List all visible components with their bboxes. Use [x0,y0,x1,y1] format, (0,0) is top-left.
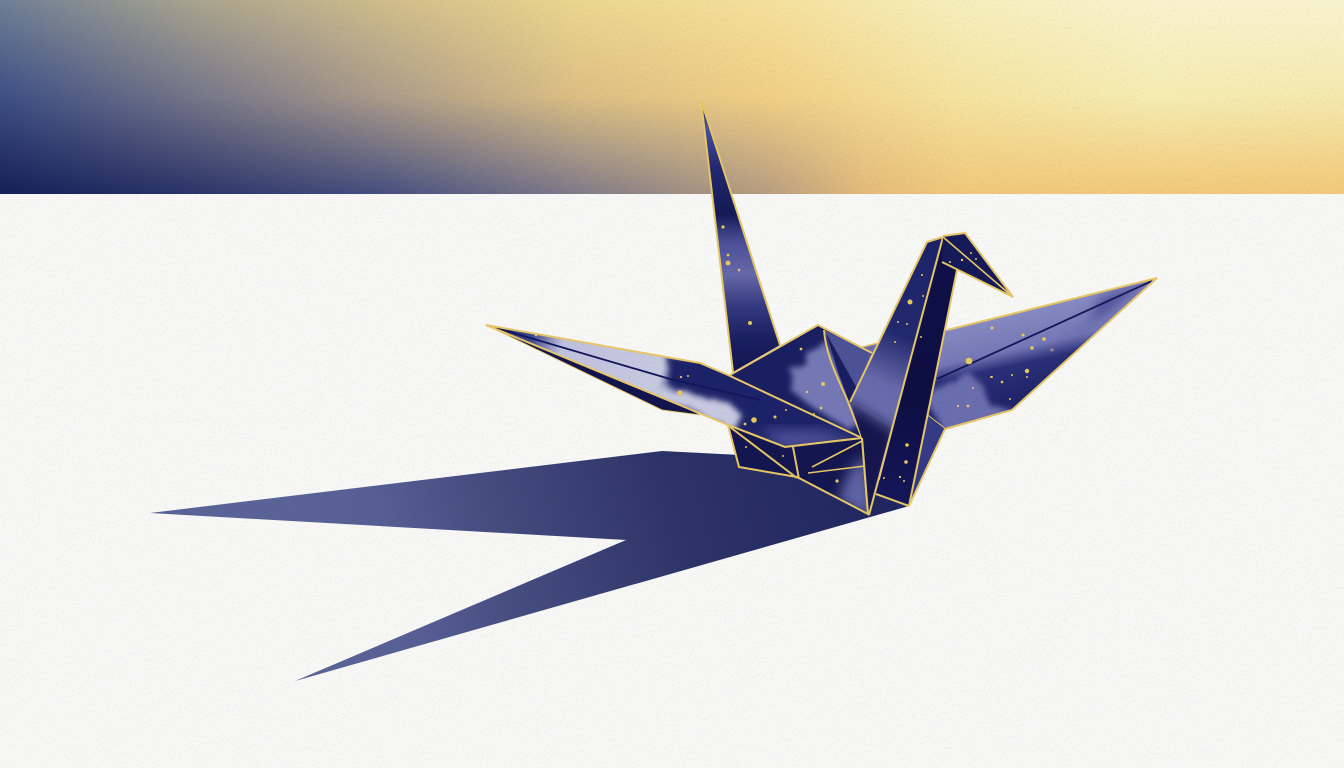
body flap fold [824,330,862,438]
crane right wing [862,275,1157,435]
crane body [730,325,872,438]
left wing fold [486,325,760,400]
crane head and beak [942,233,1013,297]
crane neck [845,237,957,530]
right wing fold [937,281,1152,379]
origami crane [486,100,1157,530]
crane cast shadow [150,451,909,681]
crane tail [701,100,780,372]
crane left wing [486,325,865,452]
gold speckles [535,225,1054,483]
sky gradient band [0,0,1344,194]
crane lower body [728,425,875,520]
